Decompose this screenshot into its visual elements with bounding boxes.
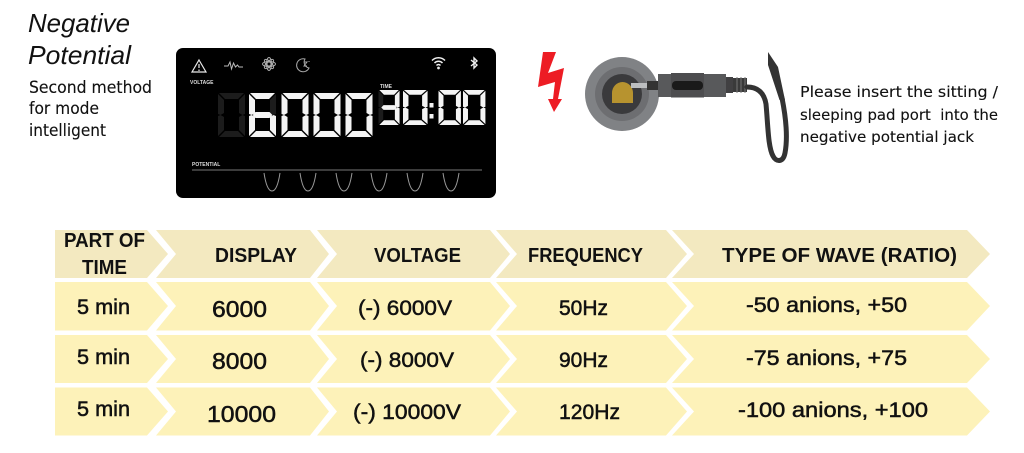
- table row: 6000: 5 min: [77, 296, 130, 319]
- table row: 6000: (-) 6000V: [358, 297, 452, 320]
- LCD reading: time 30:00: [378, 90, 485, 126]
- table header row: DISPLAY: [215, 245, 298, 267]
- table row: 8000: 90Hz: [559, 349, 608, 372]
- cable: [747, 52, 786, 161]
- text block: second method description: Second method: [29, 78, 152, 97]
- icon: bluetooth: [471, 58, 477, 68]
- table row: 8000: 8000: [212, 348, 267, 374]
- table header row: TIME: [82, 257, 127, 279]
- LCD reading: voltage 6000: [218, 93, 372, 138]
- icon: red lightning bolt: [538, 52, 564, 112]
- label: time: TIME: [380, 84, 393, 90]
- heading: negative potential: Negative: [28, 8, 130, 38]
- table row: 8000: [55, 335, 990, 383]
- text block: second method description: intelligent: [29, 121, 106, 140]
- colon: [430, 103, 434, 118]
- table row: 8000: 5 min: [77, 346, 130, 369]
- heading: negative potential: [28, 8, 132, 70]
- digit 6: [249, 93, 276, 137]
- panel: LCD display: [176, 48, 496, 198]
- table row: 8000: (-) 8000V: [360, 349, 454, 372]
- label: potential: POTENTIAL: [192, 162, 220, 168]
- chart: potential waves: [264, 173, 459, 191]
- icon: flower: [262, 58, 276, 70]
- table row: 10000: -100 anions, +100: [738, 399, 928, 422]
- table header row: PART OF: [64, 230, 145, 252]
- table row: 10000: (-) 10000V: [353, 401, 461, 424]
- table header row: [55, 230, 990, 279]
- icon: moon: [297, 59, 309, 72]
- digit 0: [346, 93, 372, 137]
- table row: 6000: 6000: [212, 296, 267, 322]
- table row: 10000: [55, 388, 990, 436]
- table row: 6000: 50Hz: [559, 297, 608, 320]
- LCD reading: time 30:00: 30:00: [390, 98, 459, 126]
- heading: negative potential: Potential: [28, 40, 132, 70]
- table row: 10000: 120Hz: [559, 401, 620, 424]
- icon: warning triangle: [192, 60, 206, 72]
- digit 0: [438, 90, 461, 125]
- table header row: FREQUENCY: [528, 245, 644, 267]
- icon: wifi: [432, 58, 445, 69]
- digit 0: [463, 90, 485, 125]
- dim digit: [218, 93, 245, 137]
- text block: second method description: for mode: [29, 99, 99, 118]
- table row: 6000: -50 anions, +50: [746, 294, 907, 317]
- text block: second method description: [29, 78, 152, 140]
- digit 3: [378, 90, 400, 125]
- table: session parameters: [55, 230, 990, 436]
- text block: port instruction: [800, 83, 999, 146]
- illustration: jack and plug: [585, 52, 786, 161]
- LCD reading: voltage 6000: 6000: [250, 103, 326, 138]
- jack socket: [585, 57, 659, 131]
- table row: 10000: 10000: [207, 401, 276, 427]
- text block: port instruction: Please insert the sitting /: [800, 83, 999, 101]
- digit 0: [314, 93, 340, 137]
- table row: 8000: -75 anions, +75: [746, 347, 907, 370]
- icon: pulse wave: [224, 62, 243, 69]
- digit 0: [282, 93, 308, 137]
- text block: port instruction: negative potential jack: [800, 128, 974, 146]
- label: voltage: VOLTAGE: [190, 80, 214, 86]
- table row: 6000: [55, 282, 990, 330]
- digit 0: [403, 90, 428, 125]
- table header row: TYPE OF WAVE (RATIO): [722, 245, 957, 267]
- text block: port instruction: sleeping pad port into the: [800, 106, 998, 124]
- plug: [631, 73, 747, 98]
- table header row: VOLTAGE: [374, 245, 461, 267]
- table row: 10000: 5 min: [77, 398, 130, 421]
